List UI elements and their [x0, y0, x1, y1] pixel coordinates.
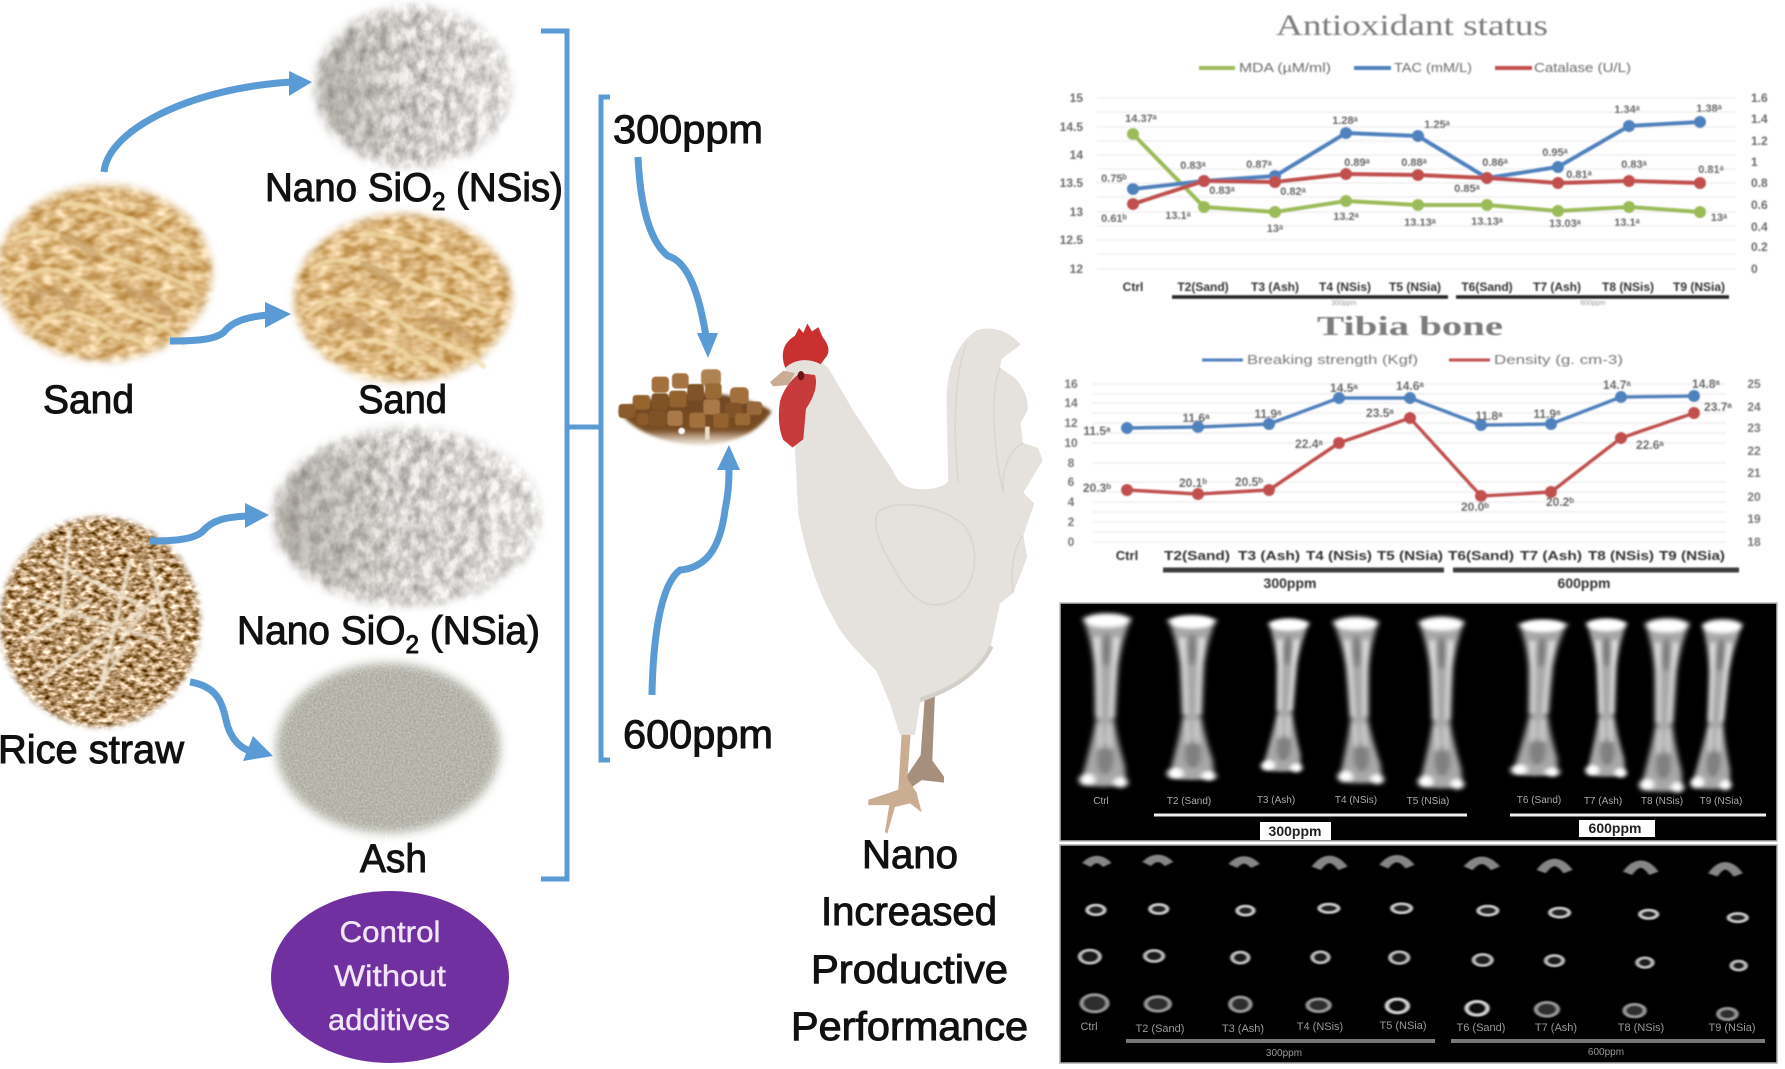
- data labels: 14.6ᵃ: [1396, 379, 1424, 393]
- data labels: [1083, 377, 1732, 514]
- data labels: 13.1ᵃ: [1614, 217, 1641, 229]
- data labels: 0.75ᵇ: [1101, 173, 1128, 185]
- chicken body: [785, 329, 1043, 735]
- image: sand product: [294, 214, 512, 382]
- data labels: 11.5ᵃ: [1083, 424, 1111, 438]
- image: ash: [276, 663, 500, 833]
- label: Nano SiO2 (NSis): Nano SiO: [265, 166, 438, 210]
- data labels: 20.5ᵇ: [1235, 475, 1263, 489]
- category labels: T8 (NSis): [1602, 280, 1654, 294]
- left axis: 4: [1068, 495, 1075, 509]
- right axis: 18: [1747, 535, 1761, 549]
- control ellipse: Control: [340, 916, 440, 949]
- category labels: T6(Sand): [1461, 280, 1513, 294]
- right axis: 19: [1747, 512, 1761, 526]
- category labels: T5 (NSia): [1389, 280, 1441, 294]
- row 2 ovals: [1087, 904, 1747, 922]
- data labels: 14.7ᵃ: [1603, 378, 1631, 392]
- bone captions: T4 (NSis): [1335, 795, 1377, 806]
- bone captions: T7 (Ash): [1584, 796, 1622, 807]
- cross sections: [1080, 858, 1747, 1020]
- left axis: 16: [1064, 377, 1078, 391]
- right axis: 0.4: [1751, 220, 1768, 234]
- right axis: 0.2: [1751, 240, 1768, 254]
- left axis: 14: [1064, 396, 1078, 410]
- right axis: 21: [1747, 466, 1761, 480]
- legend: Catalase (U/L): [1534, 60, 1631, 75]
- image: nano SiO2 from sand: [316, 7, 510, 167]
- arrow: sand to nano SiO2: [104, 71, 312, 172]
- category labels: T7 (Ash): [1520, 548, 1582, 563]
- bone captions: [1093, 795, 1742, 807]
- category labels: T2(Sand): [1177, 280, 1229, 294]
- left axis: 14.5: [1060, 120, 1083, 134]
- panel: CT tibia longitudinal: [1060, 603, 1777, 841]
- label: Rice straw: Rice straw: [0, 728, 184, 772]
- data labels: 0.81ᵃ: [1566, 169, 1593, 181]
- legend: [1202, 352, 1623, 367]
- label: 600ppm: 600ppm: [623, 713, 773, 757]
- right axis: 1: [1751, 155, 1758, 169]
- left axis: 12: [1064, 416, 1078, 430]
- data labels: 0.61ᵇ: [1101, 213, 1128, 225]
- series: breaking strength: [1121, 390, 1700, 434]
- data labels: 14.5ᵃ: [1330, 381, 1358, 395]
- left axis: [1064, 377, 1078, 549]
- icon: feed pellets: [618, 369, 772, 445]
- data labels: 0.85ᵃ: [1454, 183, 1481, 195]
- label: Nano SiO2 (NSis): (NSis): [445, 166, 563, 210]
- arrow: sand to sand: [170, 302, 291, 341]
- data labels: 11.8ᵃ: [1475, 409, 1503, 423]
- data labels: 22.4ᵃ: [1295, 437, 1323, 451]
- data labels: 20.1ᵇ: [1179, 476, 1207, 490]
- right axis: 0.6: [1751, 198, 1768, 212]
- chart title: Antioxidant status: [1276, 9, 1548, 42]
- arrow: 300ppm to feed: [638, 157, 718, 358]
- series: Catalase: [1127, 168, 1706, 210]
- right axis: 0.8: [1751, 176, 1768, 190]
- bone captions: T5 (NSia): [1407, 796, 1449, 807]
- series: density: [1121, 407, 1700, 502]
- data labels: 0.82ᵃ: [1280, 186, 1307, 198]
- label: Nano SiO2 (NSis): 2: [432, 188, 445, 216]
- chart: antioxidant status: [1060, 9, 1768, 307]
- right axis: 20: [1747, 490, 1761, 504]
- legend: TAC (mM/L): [1394, 60, 1472, 75]
- data labels: 13.13ᵃ: [1471, 216, 1504, 228]
- right axis: [1751, 91, 1768, 276]
- left axis: 6: [1068, 475, 1075, 489]
- label: Nano SiO2 (NSia): Nano SiO: [237, 609, 410, 653]
- data labels: 22.6ᵃ: [1636, 438, 1664, 452]
- category labels: T3 (Ash): [1238, 548, 1300, 563]
- bone captions: Ctrl: [1093, 796, 1109, 807]
- dose bars: [1163, 570, 1739, 591]
- data labels: 0.83ᵃ: [1209, 185, 1236, 197]
- section captions: T4 (NSis): [1297, 1021, 1343, 1033]
- control ellipse: [271, 891, 509, 1063]
- dose bars: 300ppm: [1264, 575, 1316, 591]
- dose bars: 300ppm: [1331, 300, 1357, 307]
- label: Ash: Ash: [360, 837, 427, 881]
- image: sand source: [0, 185, 212, 361]
- data labels: 11.9ᵃ: [1254, 407, 1282, 421]
- left axis: 8: [1068, 456, 1075, 470]
- right axis: 22: [1747, 444, 1761, 458]
- data labels: 14.8ᵃ: [1692, 377, 1720, 391]
- chicken eye: [798, 371, 804, 380]
- left axis: 2: [1068, 515, 1075, 529]
- dose label: 600ppm: 600ppm: [1589, 820, 1641, 836]
- data labels: 13.03ᵃ: [1549, 218, 1582, 230]
- label: Nano SiO2 (NSia): (NSia): [419, 609, 540, 653]
- data labels: 20.0ᵇ: [1461, 500, 1489, 514]
- chart title: Tibia bone: [1317, 311, 1503, 341]
- arrow: rice straw to nano SiO2: [150, 503, 269, 541]
- data labels: 0.95ᵃ: [1542, 147, 1569, 159]
- category labels: T3 (Ash): [1251, 280, 1299, 294]
- category labels: [1116, 548, 1725, 563]
- dose bars: 600ppm: [1580, 300, 1606, 307]
- legend: Breaking strength (Kgf): [1247, 352, 1418, 367]
- right axis: 1.6: [1751, 91, 1768, 105]
- row 4 rings: [1081, 995, 1737, 1020]
- data labels: 0.87ᵃ: [1246, 159, 1273, 171]
- conclusion text: [791, 833, 1028, 1049]
- chicken wattle: [779, 373, 816, 447]
- category labels: T6(Sand): [1448, 548, 1514, 563]
- image: rice straw: [0, 517, 200, 727]
- dose label: 600ppm: 600ppm: [1588, 1047, 1624, 1058]
- right axis: 24: [1747, 400, 1761, 414]
- bone captions: T8 (NSis): [1641, 796, 1683, 807]
- section captions: [1080, 1020, 1756, 1035]
- bone captions: T9 (NSia): [1700, 796, 1742, 807]
- data labels: 23.7ᵃ: [1704, 400, 1732, 414]
- row 1 crescents: [1087, 858, 1738, 875]
- section captions: T9 (NSia): [1708, 1022, 1756, 1034]
- label: Sand: Sand: [358, 378, 447, 422]
- data labels: 1.34ᵃ: [1614, 104, 1641, 116]
- row 3 rings: [1080, 950, 1746, 970]
- bone captions: T6 (Sand): [1517, 795, 1561, 806]
- series: MDA: [1127, 128, 1706, 218]
- left axis: 13: [1070, 205, 1083, 219]
- bone captions: T3 (Ash): [1257, 795, 1295, 806]
- label: 300ppm: 300ppm: [613, 108, 763, 152]
- category labels: T9 (NSia): [1673, 280, 1725, 294]
- series: TAC: [1127, 116, 1706, 195]
- chicken rear leg: [905, 694, 944, 790]
- data labels: 1.28ᵃ: [1332, 115, 1359, 127]
- right axis: 23: [1747, 421, 1761, 435]
- chicken comb: [783, 324, 828, 368]
- data labels: 0.86ᵃ: [1482, 157, 1509, 169]
- chicken wing and feather shading: [876, 343, 1023, 700]
- conclusion text: Performance: [791, 1005, 1028, 1049]
- data labels: 23.5ᵃ: [1366, 406, 1394, 420]
- data labels: [1101, 103, 1728, 235]
- label: Sand: Sand: [43, 378, 134, 422]
- bone captions: T2 (Sand): [1167, 796, 1211, 807]
- bracket: treatments: [541, 31, 601, 879]
- conclusion text: Increased: [821, 890, 997, 934]
- dose label: 600ppm: [1579, 820, 1655, 837]
- category labels: T4 (NSis): [1306, 548, 1372, 563]
- left axis: 10: [1064, 436, 1078, 450]
- left axis: 0: [1068, 535, 1075, 549]
- section captions: T2 (Sand): [1136, 1023, 1184, 1035]
- section captions: T7 (Ash): [1535, 1022, 1577, 1034]
- panel: raw materials and nano silica sources: [0, 7, 563, 881]
- data labels: 0.88ᵃ: [1401, 157, 1428, 169]
- left axis: 15: [1070, 91, 1083, 105]
- image: nano SiO2 from ash: [273, 429, 539, 605]
- right axis: 25: [1747, 377, 1761, 391]
- data labels: 0.83ᵃ: [1180, 160, 1207, 172]
- control ellipse: additives: [328, 1004, 450, 1037]
- section captions: T8 (NSis): [1618, 1022, 1664, 1034]
- dose bars: [1172, 297, 1729, 307]
- data labels: 20.3ᵇ: [1083, 481, 1111, 495]
- tibia bones: [1079, 613, 1743, 793]
- data labels: 1.38ᵃ: [1696, 103, 1723, 115]
- left axis: 14: [1070, 148, 1083, 162]
- arrow: 600ppm to feed: [652, 445, 740, 695]
- data labels: 13ᵃ: [1267, 223, 1284, 235]
- category labels: Ctrl: [1123, 280, 1143, 294]
- right axis: 1.2: [1751, 134, 1768, 148]
- data labels: 13.2ᵃ: [1333, 211, 1360, 223]
- conclusion text: Productive: [811, 948, 1008, 992]
- section captions: T6 (Sand): [1457, 1022, 1505, 1034]
- data labels: 14.37ᵃ: [1125, 113, 1158, 125]
- data labels: 13ᵃ: [1711, 212, 1728, 224]
- illustration: chicken: [770, 324, 1043, 834]
- category labels: [1123, 280, 1725, 294]
- arrow: rice straw to ash: [190, 682, 273, 761]
- category labels: T5 (NSia): [1377, 548, 1443, 563]
- data labels: 13.13ᵃ: [1404, 217, 1437, 229]
- chart: tibia bone: [1064, 311, 1761, 591]
- chicken front leg: [868, 734, 922, 834]
- dose label: 300ppm: 300ppm: [1269, 823, 1321, 839]
- data labels: 0.83ᵃ: [1621, 159, 1648, 171]
- category labels: Ctrl: [1116, 548, 1138, 563]
- panel: CT tibia cross sections: [1060, 845, 1777, 1063]
- legend: Density (g. cm-3): [1494, 352, 1623, 367]
- left axis: 12: [1070, 262, 1083, 276]
- category labels: T2(Sand): [1164, 548, 1230, 563]
- conclusion text: Nano: [862, 833, 958, 877]
- data labels: 20.2ᵇ: [1546, 495, 1574, 509]
- left axis: [1060, 91, 1083, 276]
- category labels: T4 (NSis): [1319, 280, 1371, 294]
- category labels: T7 (Ash): [1533, 280, 1581, 294]
- dose bars: 600ppm: [1558, 575, 1610, 591]
- data labels: 11.9ᵃ: [1533, 407, 1561, 421]
- section captions: Ctrl: [1080, 1021, 1098, 1033]
- data labels: 0.81ᵃ: [1698, 164, 1725, 176]
- section captions: T3 (Ash): [1222, 1023, 1264, 1035]
- right axis: 1.4: [1751, 112, 1768, 126]
- section captions: T5 (NSia): [1379, 1020, 1427, 1032]
- data labels: 0.89ᵃ: [1344, 157, 1371, 169]
- label: Nano SiO2 (NSia): 2: [406, 631, 419, 659]
- bracket: doses: [601, 97, 610, 760]
- control ellipse: Without: [334, 960, 447, 993]
- data labels: 13.1ᵃ: [1165, 210, 1192, 222]
- right axis: [1747, 377, 1761, 549]
- legend: [1199, 60, 1631, 75]
- category labels: T9 (NSia): [1659, 548, 1725, 563]
- data labels: 1.25ᵃ: [1424, 119, 1451, 131]
- right axis: 0: [1751, 262, 1758, 276]
- legend: MDA (µM/ml): [1239, 60, 1331, 75]
- category labels: T8 (NSis): [1588, 548, 1654, 563]
- left axis: 13.5: [1060, 176, 1083, 190]
- chicken beak: [770, 371, 795, 386]
- dose label: 300ppm: 300ppm: [1266, 1048, 1302, 1059]
- data labels: 11.6ᵃ: [1182, 411, 1210, 425]
- dose label: 300ppm: [1260, 822, 1331, 840]
- left axis: 12.5: [1060, 233, 1083, 247]
